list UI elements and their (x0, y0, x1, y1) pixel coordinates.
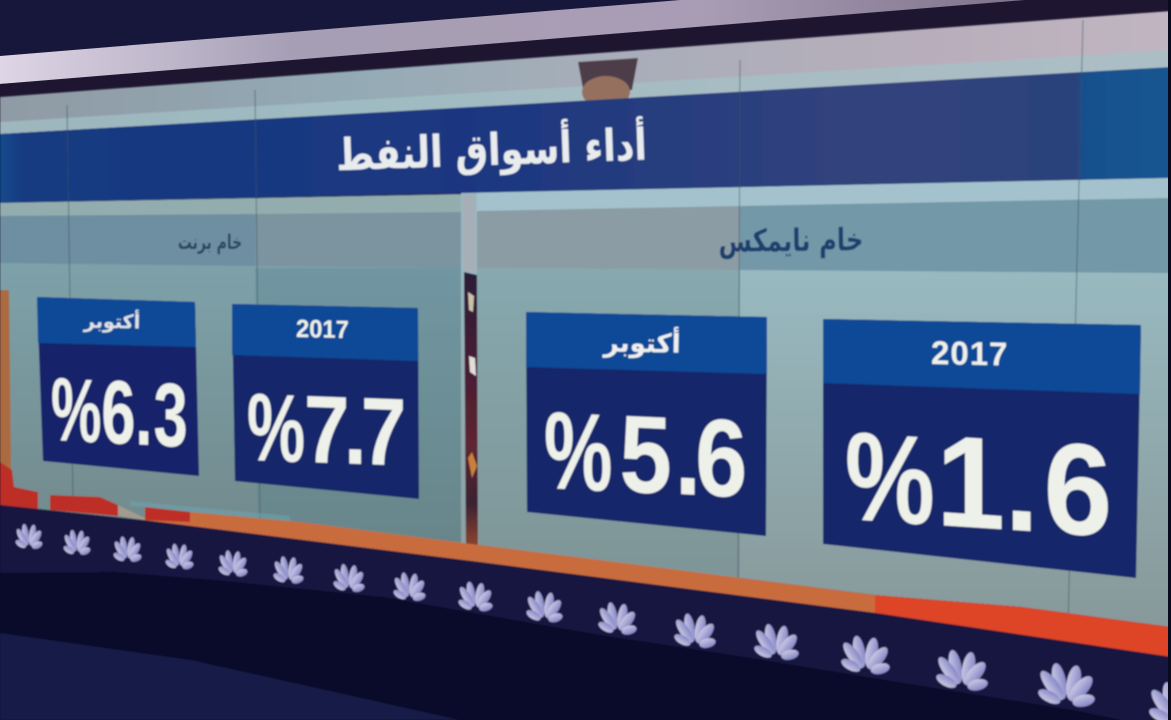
value 5.6%: % (544, 390, 612, 515)
right panel light band (477, 178, 1171, 211)
left edge strip (0, 290, 11, 470)
body shade left of seam (477, 268, 740, 578)
value 5.6%: 5.6 (620, 392, 747, 521)
right panel body (461, 178, 1171, 627)
divider column (462, 194, 478, 562)
title bar (0, 67, 1171, 203)
top lavender strip (0, 0, 1171, 84)
box header 2017 (823, 319, 1141, 394)
screen edge right (1168, 0, 1171, 720)
right panel: خام نايمكس (461, 178, 1171, 627)
value 7.7% (247, 375, 406, 486)
box: خام برنت 2017 (232, 304, 419, 499)
value 7.7%: % (247, 375, 305, 483)
left panel light band (0, 194, 461, 216)
top ceiling dark area (0, 0, 680, 56)
dome ornament (578, 58, 638, 108)
box header October (526, 312, 767, 374)
logo row: peacock icons (14, 523, 1171, 720)
teal streak (130, 501, 290, 521)
dark band under strip (0, 0, 1171, 97)
lower floor (0, 633, 460, 720)
heading: خام نايمكس: خام نايمكس (718, 221, 864, 260)
box: خام نايمكس 2017 (823, 319, 1141, 578)
left panel header band (0, 214, 255, 266)
left panel: خام برنت (0, 194, 465, 546)
value 7.7%: 7.7 (304, 375, 406, 486)
grey block (118, 505, 145, 520)
label 2017: 2017 (931, 334, 1008, 373)
heading: خام برنت: خام برنت (178, 231, 242, 255)
label October: أكتوبر (601, 325, 681, 360)
panel seams (67, 20, 1083, 625)
red ledge (875, 595, 1171, 657)
box header October (37, 297, 196, 347)
right panel header band gray (477, 206, 740, 270)
left panel body (0, 194, 465, 546)
light strip above title bar (0, 50, 1171, 134)
orange ledge (142, 512, 875, 613)
left panel header band, gray part (255, 212, 461, 268)
box: خام برنت October (37, 297, 199, 476)
label 2017: 2017 (296, 315, 349, 344)
value 1.6%: 1.6 (936, 407, 1112, 564)
label October: أكتوبر (83, 308, 140, 333)
logo strip background (0, 505, 1171, 720)
value 1.6%: % (845, 406, 935, 552)
left panel body, right part (255, 268, 465, 546)
value 6.3% (51, 359, 188, 467)
box: خام نايمكس October (526, 312, 767, 536)
value 6.3%: 6.3 (101, 362, 188, 467)
box header 2017 (232, 304, 418, 361)
title: أداء أسواق النفط (335, 116, 648, 181)
right panel header band blue (740, 198, 1171, 273)
value 6.3%: % (51, 359, 101, 462)
value 5.6% (544, 390, 747, 521)
value 1.6% (845, 406, 1112, 564)
upper wall panel above title (0, 11, 1171, 134)
red blocks left (0, 462, 190, 522)
